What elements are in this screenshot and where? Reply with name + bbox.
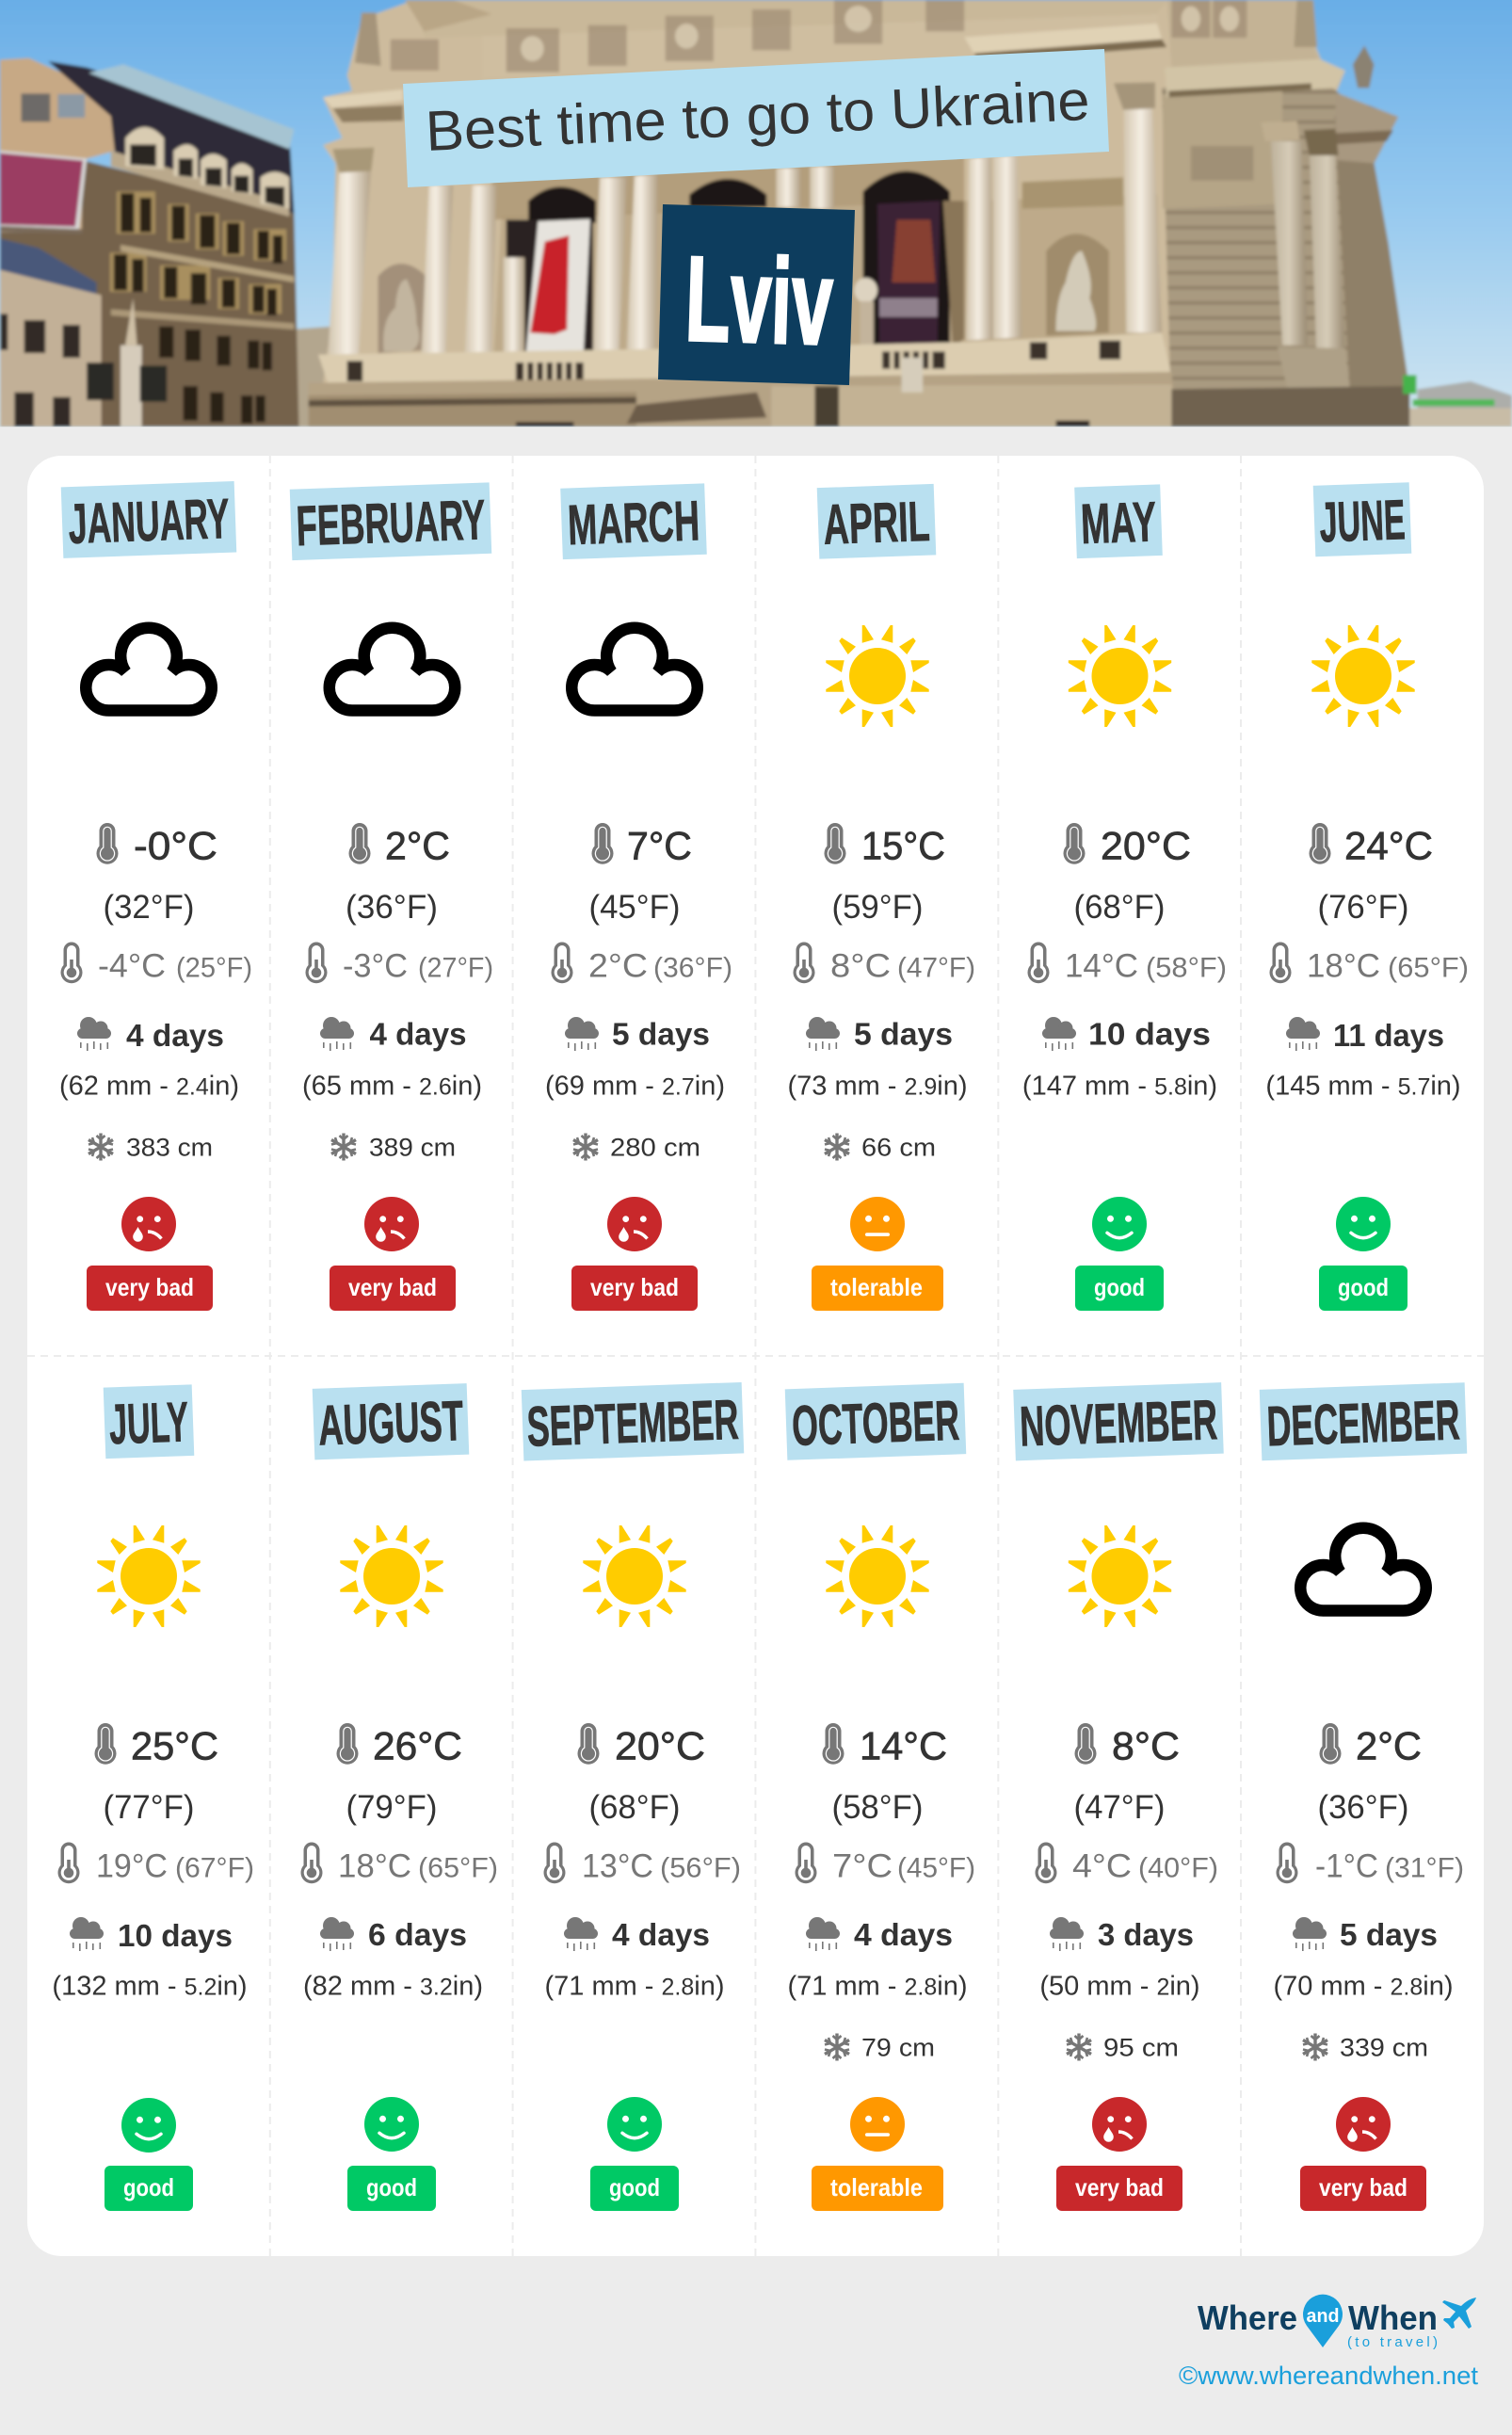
- low temperature: 7°C: [832, 1847, 893, 1885]
- snowfall: 389 cm: [369, 1134, 456, 1162]
- high temperature: [1073, 1723, 1180, 1826]
- high temperature: [94, 1723, 218, 1826]
- rainy days: (50 mm - 2in): [1039, 1972, 1200, 2002]
- low temperature: [544, 1842, 741, 1885]
- icon: cloud: [86, 628, 212, 710]
- icon: sun: [97, 1525, 201, 1627]
- rating: tolerable: tolerable: [830, 2173, 923, 2201]
- low temperature: (45°F): [897, 1853, 975, 1883]
- logo: Where and When: [1198, 2295, 1476, 2350]
- rainy days: (65 mm - 2.6in): [302, 1072, 482, 1102]
- rainy days: 5 days: [854, 1017, 953, 1051]
- rainy days: (82 mm - 3.2in): [303, 1972, 483, 2002]
- rainy days: [787, 1017, 968, 1102]
- low temperature: [1269, 942, 1469, 985]
- rating: very bad: [1300, 2097, 1426, 2211]
- city name banner: Lviv: [658, 204, 855, 385]
- low temperature: 2°C: [588, 947, 648, 985]
- low temperature: [301, 1842, 498, 1885]
- snowfall: 383 cm: [126, 1134, 213, 1162]
- rainy days: (70 mm - 2.8in): [1273, 1972, 1454, 2002]
- high temperature: (36°F): [1318, 1789, 1408, 1826]
- column: December: [1260, 1382, 1467, 2211]
- column: June: [1265, 482, 1469, 1311]
- month heading: June: JUNE: [1318, 488, 1407, 554]
- rating: good: [1075, 1197, 1164, 1311]
- rainy days: 10 days: [1088, 1017, 1211, 1051]
- month heading: October: [785, 1383, 966, 1460]
- high temperature: (58°F): [832, 1789, 923, 1826]
- column: October: [785, 1383, 975, 2211]
- low temperature: (65°F): [1388, 953, 1469, 983]
- high temperature: 8°C: [1112, 1723, 1180, 1768]
- low temperature: (67°F): [175, 1853, 254, 1883]
- month heading: February: [290, 482, 491, 560]
- icon: map pin: and: [1307, 2306, 1339, 2327]
- rainy days: [302, 1017, 482, 1102]
- column: May: [1022, 484, 1227, 1311]
- rating: tolerable: [812, 1197, 943, 1311]
- month heading: October: OCTOBER: [791, 1389, 960, 1458]
- low temperature: -1°C: [1315, 1847, 1378, 1885]
- month heading: January: JANUARY: [67, 487, 231, 556]
- low temperature: (36°F): [653, 953, 732, 983]
- column: August: [301, 1383, 498, 2211]
- month heading: September: [522, 1382, 744, 1461]
- icon: sun: [583, 1525, 686, 1627]
- column: September: [522, 1382, 744, 2211]
- rating: good: good: [609, 2173, 660, 2201]
- low temperature: 4°C: [1072, 1847, 1132, 1885]
- column: April: [787, 484, 975, 1311]
- high temperature: [346, 823, 450, 926]
- month heading: July: [104, 1384, 194, 1459]
- high temperature: 25°C: [131, 1723, 218, 1768]
- rating: very bad: very bad: [348, 1273, 437, 1301]
- snowfall: 339 cm: [1340, 2034, 1428, 2062]
- rating: very bad: [330, 1197, 456, 1311]
- rainy days: [1039, 1917, 1200, 2002]
- column: November: [1013, 1382, 1224, 2211]
- high temperature: 7°C: [627, 823, 692, 868]
- month heading: November: NOVEMBER: [1019, 1388, 1218, 1458]
- snowfall: [1303, 2034, 1428, 2062]
- rainy days: [52, 1917, 248, 2002]
- month heading: April: [817, 484, 936, 559]
- high temperature: [1318, 1723, 1422, 1826]
- icon: cloud: [1300, 1528, 1426, 1610]
- month heading: August: AUGUST: [317, 1389, 464, 1457]
- rainy days: (69 mm - 2.7in): [545, 1072, 725, 1102]
- icon: sun: [340, 1525, 443, 1627]
- snowfall: 66 cm: [861, 1134, 936, 1162]
- low temperature: (65°F): [418, 1853, 498, 1883]
- row: July to December: [52, 1382, 1467, 2211]
- rainy days: 4 days: [854, 1917, 953, 1952]
- high temperature: [823, 1723, 947, 1826]
- row: January to June: [59, 481, 1469, 1311]
- icon: cloud: [330, 628, 455, 710]
- rating: very bad: [87, 1197, 213, 1311]
- high temperature: (68°F): [589, 1789, 680, 1826]
- high temperature: (32°F): [104, 889, 194, 926]
- high temperature: 2°C: [1356, 1723, 1422, 1768]
- rating: very bad: very bad: [590, 1273, 679, 1301]
- month heading: May: MAY: [1080, 490, 1157, 556]
- low temperature: 13°C: [582, 1847, 653, 1885]
- low temperature: 18°C: [338, 1847, 411, 1885]
- rating: very bad: very bad: [1319, 2173, 1407, 2201]
- high temperature: [96, 823, 217, 926]
- month heading: June: [1313, 482, 1411, 556]
- rainy days: (71 mm - 2.8in): [544, 1972, 725, 2002]
- title banner: [403, 49, 1109, 187]
- low temperature: [305, 942, 493, 985]
- low temperature: (56°F): [660, 1853, 741, 1883]
- icon: sun: [826, 625, 929, 727]
- high temperature: [589, 823, 692, 926]
- panel: monthly calendar card: [27, 456, 1484, 2256]
- high temperature: (68°F): [1073, 889, 1166, 926]
- month heading: September: SEPTEMBER: [525, 1388, 740, 1459]
- rating: good: [1319, 1197, 1407, 1311]
- website credit: ©www.whereandwhen.net: [1179, 2362, 1478, 2390]
- header photo: Lviv opera house: [0, 0, 1512, 433]
- month heading: February: FEBRUARY: [295, 488, 487, 557]
- rating: good: good: [123, 2173, 174, 2201]
- month heading: November: [1013, 1382, 1224, 1460]
- stone body: [322, 0, 1344, 383]
- rating: good: [590, 2097, 679, 2211]
- icon: sun: [1069, 625, 1171, 727]
- month heading: May: [1074, 484, 1163, 558]
- high temperature: 14°C: [860, 1723, 947, 1768]
- rating: good: good: [366, 2173, 417, 2201]
- logo: Where and When: (to travel): [1347, 2334, 1438, 2350]
- icon: sun: [1069, 1525, 1171, 1627]
- logo: Where and When: Where: [1198, 2298, 1297, 2337]
- low temperature: [552, 942, 732, 985]
- rainy days: 5 days: [1340, 1917, 1438, 1952]
- column: July: [52, 1384, 254, 2211]
- high temperature: 26°C: [373, 1723, 462, 1768]
- month heading: March: MARCH: [567, 489, 700, 556]
- rainy days: (73 mm - 2.9in): [787, 1072, 968, 1102]
- low temperature: [1036, 1842, 1218, 1885]
- low temperature: (27°F): [418, 953, 493, 983]
- rating: good: [105, 2098, 193, 2211]
- low temperature: 8°C: [830, 947, 891, 985]
- high temperature: [825, 823, 945, 926]
- low temperature: -3°C: [343, 947, 408, 985]
- low temperature: [793, 942, 975, 985]
- rating: good: [347, 2097, 436, 2211]
- high temperature: (76°F): [1318, 889, 1408, 926]
- high temperature: (47°F): [1073, 1789, 1166, 1826]
- low temperature: [1028, 942, 1227, 985]
- high temperature: [337, 1723, 462, 1826]
- rainy days: (71 mm - 2.8in): [787, 1972, 968, 2002]
- rainy days: [545, 1017, 725, 1102]
- rainy days: [544, 1917, 725, 2002]
- low temperature: (31°F): [1385, 1853, 1464, 1883]
- icon: airplane: [1442, 2298, 1476, 2329]
- snowfall: [1067, 2034, 1179, 2062]
- high temperature: 2°C: [385, 823, 450, 868]
- high temperature: 15°C: [861, 823, 945, 868]
- rating: good: good: [1338, 1273, 1389, 1301]
- icon: cloud: [571, 628, 698, 710]
- rainy days: (145 mm - 5.7in): [1265, 1072, 1461, 1102]
- low temperature: (25°F): [176, 953, 252, 983]
- snowfall: [825, 1134, 936, 1162]
- high temperature: (59°F): [832, 889, 923, 926]
- low temperature: (40°F): [1138, 1853, 1218, 1883]
- low temperature: 14°C: [1065, 947, 1138, 985]
- column: March: [545, 483, 732, 1311]
- high temperature: [1064, 823, 1191, 926]
- rating: tolerable: [812, 2097, 943, 2211]
- rainy days: [1022, 1017, 1217, 1102]
- snowfall: 79 cm: [861, 2034, 935, 2062]
- city name banner: Lviv: Lviv: [684, 232, 834, 371]
- icon: map pin: [1303, 2295, 1343, 2347]
- rainy days: (132 mm - 5.2in): [52, 1972, 248, 2002]
- month heading: August: [313, 1383, 469, 1459]
- month heading: January: [61, 481, 236, 558]
- snowfall: [573, 1134, 700, 1162]
- snowfall: [331, 1134, 456, 1162]
- low temperature: [795, 1842, 975, 1885]
- logo: Where and When: When: [1348, 2298, 1438, 2337]
- rainy days: 11 days: [1333, 1018, 1444, 1053]
- high temperature: 20°C: [1101, 823, 1191, 868]
- column: February: [290, 482, 493, 1311]
- rainy days: 5 days: [612, 1017, 710, 1051]
- snowfall: 95 cm: [1103, 2034, 1179, 2062]
- rating: very bad: very bad: [105, 1273, 194, 1301]
- rainy days: 10 days: [118, 1918, 233, 1953]
- snowfall: [825, 2034, 935, 2062]
- rainy days: 6 days: [368, 1917, 467, 1952]
- column: January: [59, 481, 252, 1311]
- high temperature: (79°F): [346, 1789, 437, 1826]
- month heading: April: APRIL: [822, 490, 931, 556]
- rainy days: 4 days: [126, 1018, 224, 1053]
- rainy days: [1273, 1917, 1454, 2002]
- rainy days: (147 mm - 5.8in): [1022, 1072, 1217, 1102]
- rainy days: 3 days: [1098, 1917, 1194, 1952]
- rating: very bad: [571, 1197, 698, 1311]
- rainy days: [303, 1917, 483, 2002]
- rainy days: [787, 1917, 968, 2002]
- low temperature: 19°C: [96, 1847, 168, 1885]
- icon: sun: [1311, 625, 1415, 727]
- rating: good: good: [1094, 1273, 1145, 1301]
- snowfall: [88, 1134, 213, 1162]
- low temperature: [60, 942, 252, 985]
- high temperature: (77°F): [104, 1789, 194, 1826]
- icon: sun: [826, 1525, 929, 1627]
- low temperature: 18°C: [1307, 947, 1380, 985]
- low temperature: (47°F): [897, 953, 975, 983]
- rainy days: 4 days: [612, 1917, 710, 1952]
- high temperature: (45°F): [589, 889, 680, 926]
- rating: tolerable: tolerable: [830, 1273, 923, 1301]
- high temperature: (36°F): [346, 889, 438, 926]
- rating: very bad: very bad: [1075, 2173, 1164, 2201]
- snowfall: 280 cm: [610, 1134, 700, 1162]
- rainy days: [1265, 1017, 1461, 1102]
- low temperature: (58°F): [1146, 953, 1227, 983]
- rating: very bad: [1056, 2097, 1182, 2211]
- rainy days: [59, 1017, 239, 1102]
- high temperature: 24°C: [1344, 823, 1433, 868]
- high temperature: 20°C: [615, 1723, 705, 1768]
- high temperature: -0°C: [134, 823, 217, 868]
- rainy days: 4 days: [369, 1017, 467, 1051]
- title banner: Best time to go to Ukraine: [424, 69, 1091, 163]
- low temperature: [58, 1842, 254, 1885]
- high temperature: [1309, 823, 1433, 926]
- month heading: March: [560, 483, 707, 559]
- month heading: July: JULY: [108, 1390, 189, 1456]
- low temperature: -4°C: [98, 947, 166, 985]
- low temperature: [1277, 1842, 1464, 1885]
- rainy days: (62 mm - 2.4in): [59, 1072, 239, 1102]
- high temperature: [578, 1723, 705, 1826]
